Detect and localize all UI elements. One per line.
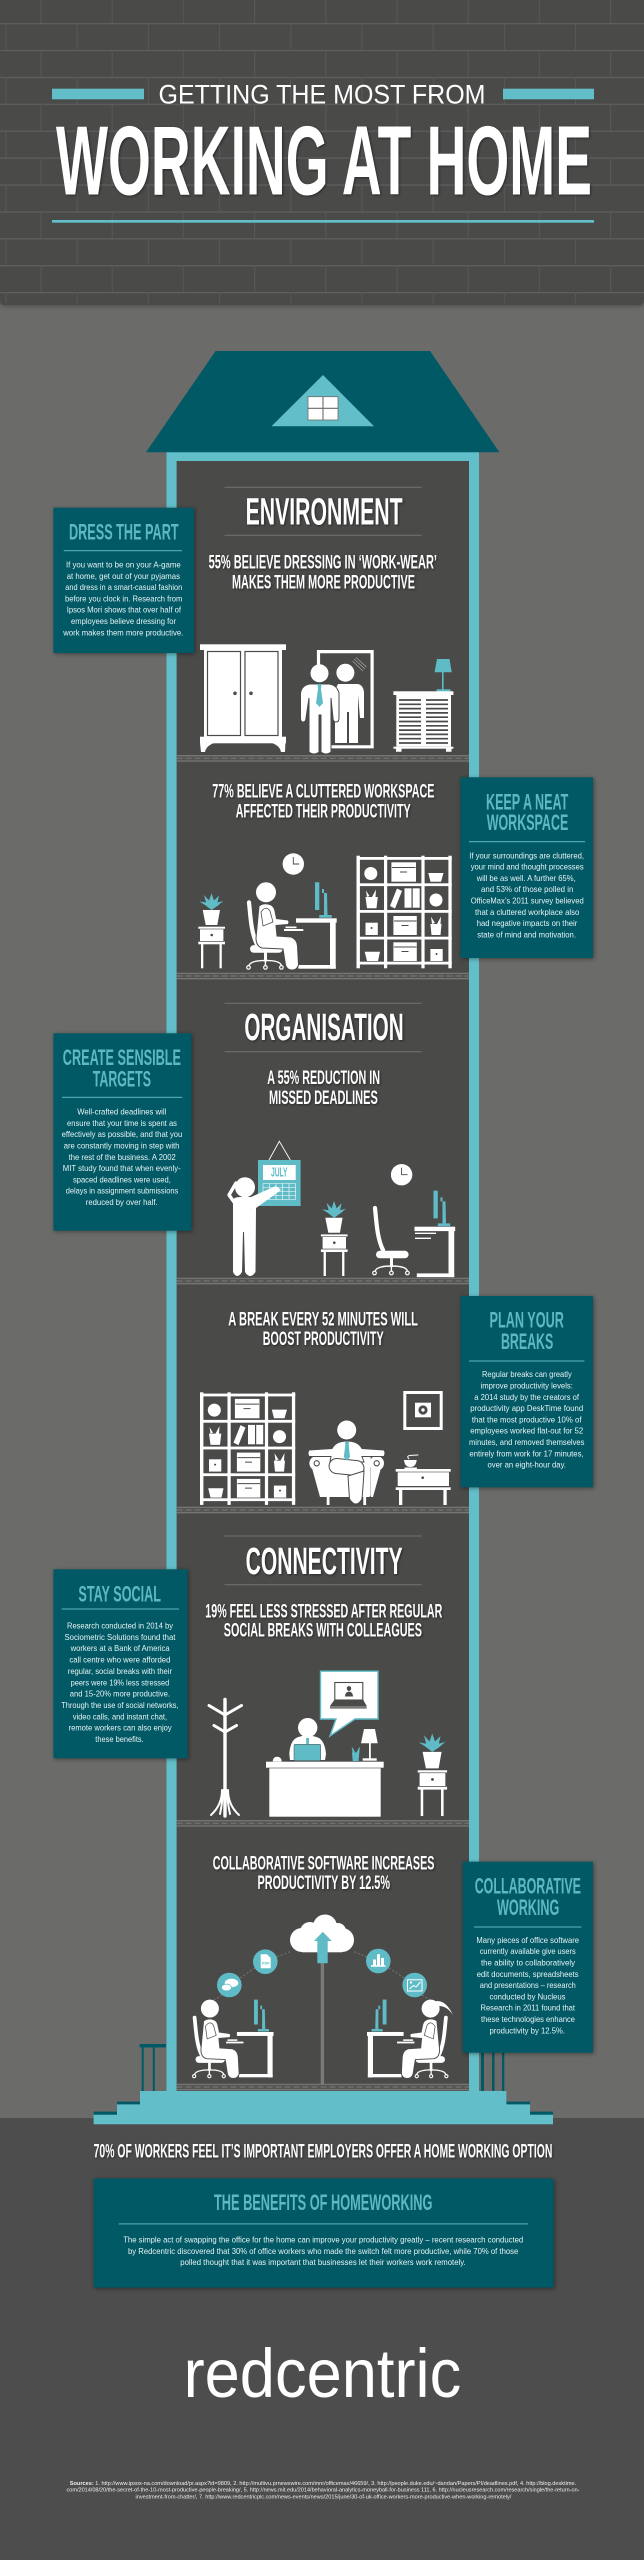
icon: chat circle [217, 1973, 242, 1997]
stat: break every 52 minutes: A BREAK EVERY 52 MINUTES WILL [228, 1309, 418, 1331]
icon: plant on stand [418, 1734, 447, 1816]
callout: plan your breaks [460, 1296, 593, 1487]
stat: cluttered workspace [212, 780, 435, 822]
stat: less stressed: SOCIAL BREAKS WITH COLLEAGUES [224, 1620, 422, 1642]
section heading: organisation: ORGANISATION [244, 1007, 404, 1049]
icon: bar chart circle [366, 1949, 391, 1973]
icon: coat stand [209, 1700, 242, 1816]
dotted connectors [214, 1952, 430, 2084]
icon: cabinet [393, 691, 453, 752]
seated figure [308, 1441, 385, 1504]
callout: create sensible targets: reduced by over half. [86, 1197, 158, 1207]
icon: pdf document circle: PDF [262, 1962, 270, 1966]
icon: person at mirror [300, 652, 372, 754]
icon: empty office chair [373, 1208, 409, 1275]
callout: stay social: these benefits. [95, 1734, 144, 1744]
callout: keep a neat workspace: will be as well. A further 65%, [476, 873, 576, 883]
icon: shelves [356, 856, 452, 968]
header accent bar left [52, 89, 144, 99]
stat: collaborative software: PRODUCTIVITY BY 12.5% [258, 1872, 390, 1894]
icon: wall clock [391, 1164, 412, 1185]
callout: plan your breaks: improve productivity levels: [480, 1380, 573, 1390]
callout: stay social: Research conducted in 2014 by [67, 1620, 174, 1630]
sources: investment-from-chatter/, 7. http://www.redcentricplc.com/news-events/news/2015/june/30-of-uk-office-workers-more-productive-when-working-remotely/ [136, 2495, 512, 2501]
callout: create sensible targets: are constantly moving in step with [64, 1140, 180, 1150]
icon: presentation chart circle [402, 1973, 427, 1997]
callout: keep a neat workspace: and 53% of those polled in [481, 884, 573, 894]
icon: left remote worker [193, 2000, 274, 2078]
callout: stay social: Sociometric Solutions found that [64, 1632, 176, 1642]
callout: stay social: peers were 19% less stressed [71, 1677, 169, 1687]
callout: stay social: regular, social breaks with their [68, 1666, 172, 1676]
reflection [335, 664, 364, 743]
panel: benefits of homeworking: THE BENEFITS OF HOMEWORKING [214, 2190, 432, 2215]
callout: collaborative working: productivity by 12.5%. [490, 2025, 565, 2035]
callout: collaborative working [463, 1862, 593, 2053]
callout: dress the part: and dress in a smart-casual fashion [65, 582, 182, 592]
callout: keep a neat workspace [460, 777, 593, 958]
icon: plant on stand [321, 1201, 348, 1276]
callout: plan your breaks: PLAN YOUR [490, 1308, 564, 1333]
callout: plan your breaks: productivity app DeskTime found [470, 1403, 583, 1413]
icon: desk and monitor [414, 1191, 455, 1277]
stat: work-wear: MAKES THEM MORE PRODUCTIVE [232, 571, 415, 593]
mirror glint [352, 658, 366, 671]
stat: break every 52 minutes [228, 1309, 418, 1350]
icon: person in armchair [308, 1420, 385, 1505]
steps dark edges [94, 2102, 553, 2115]
callout: keep a neat workspace: OfficeMax’s 2011 survey believed [471, 896, 584, 906]
callout: plan your breaks: entirely from work for 17 minutes, [469, 1448, 584, 1458]
callout: plan your breaks: BREAKS [501, 1329, 553, 1354]
callout: create sensible targets: TARGETS [93, 1067, 151, 1092]
armchair [309, 1456, 384, 1505]
callout: collaborative working: Many pieces of office software [476, 1935, 579, 1945]
section heading: connectivity [225, 1536, 422, 1585]
stat: deadlines: MISSED DEADLINES [269, 1087, 378, 1109]
callout: create sensible targets: effectively as possible, and that you [62, 1129, 182, 1139]
callout: plan your breaks: over an eight-hour day. [488, 1460, 566, 1470]
callout: keep a neat workspace: If your surroundings are cluttered, [469, 850, 584, 860]
callout: collaborative working: the ability to collaboratively [481, 1958, 576, 1968]
callout: dress the part [53, 508, 194, 653]
header panel: brick wall [0, 0, 644, 305]
callout: stay social [53, 1569, 188, 1758]
callout: stay social: remote workers can also enjoy [69, 1723, 172, 1733]
stat: deadlines: A 55% REDUCTION IN [267, 1067, 380, 1089]
callout: create sensible targets: Well-crafted deadlines will [77, 1107, 166, 1117]
callout: create sensible targets: spaced deadlines were used, [73, 1174, 171, 1184]
callout: keep a neat workspace: state of mind and motivation. [477, 929, 576, 939]
railing right [481, 2044, 504, 2091]
panel: benefits of homeworking: polled thought that it was important that businesses let their workers work remotely. [180, 2257, 466, 2267]
icon: lamp [434, 659, 452, 692]
callout: create sensible targets [53, 1033, 191, 1231]
callout: stay social: video calls, and instant chat, [73, 1711, 167, 1721]
icon: plant on stand [198, 893, 225, 968]
header accent bar right [503, 89, 594, 99]
panel: benefits of homeworking: by Redcentric discovered that 30% of office workers who made the switch felt more productive, while 70% of those [128, 2246, 518, 2256]
callout: dress the part: DRESS THE PART [69, 519, 179, 544]
mirror frame [318, 652, 372, 747]
dormer window [308, 397, 338, 420]
stat: cluttered workspace: AFFECTED THEIR PRODUCTIVITY [236, 800, 411, 822]
stat: deadlines [267, 1067, 380, 1109]
icon: pen cup [352, 1747, 360, 1761]
callout: dress the part: at home, get out of your pyjamas [67, 571, 180, 581]
railing left [140, 2044, 166, 2091]
callout: stay social: STAY SOCIAL [78, 1582, 161, 1607]
callout: plan your breaks: that the most productive 10% of [472, 1414, 582, 1424]
callout: plan your breaks: minutes, and removed themselves [469, 1437, 584, 1447]
logo: redcentric: redcentric [184, 2335, 461, 2412]
icon: wall clock [283, 853, 304, 875]
callout: dress the part: If you want to be on your A-game [66, 560, 181, 570]
callout: keep a neat workspace: that a cluttered workplace also [475, 907, 579, 917]
callout: dress the part: employees believe dressing for [71, 616, 176, 626]
callout: stay social: Through the use of social networks, [61, 1700, 179, 1710]
callout: create sensible targets: MIT study found that when evenly- [63, 1163, 181, 1173]
callout: collaborative working: WORKING [497, 1895, 559, 1920]
house interior [177, 461, 469, 2091]
ground background: dark footer [0, 2118, 644, 2560]
callout: keep a neat workspace: WORKSPACE [487, 810, 568, 835]
section heading: environment: ENVIRONMENT [246, 491, 403, 533]
icon: seated worker [247, 882, 303, 970]
dormer [272, 375, 374, 426]
stat: collaborative software: COLLABORATIVE SOFTWARE INCREASES [213, 1852, 435, 1874]
callout: dress the part: Ipsos Mori shows that over half of [67, 605, 182, 615]
icon: speech bubble with video call [320, 1671, 378, 1736]
callout: collaborative working: conducted by Nucleus [490, 1991, 566, 2001]
icon: calendar: JULY [271, 1165, 288, 1180]
icon: cloud upload [290, 1914, 354, 1963]
icon: calendar [258, 1141, 301, 1206]
section heading: connectivity: CONNECTIVITY [246, 1541, 403, 1583]
sources [66, 2481, 580, 2501]
callout: keep a neat workspace: KEEP A NEAT [486, 789, 568, 814]
section heading: environment [225, 487, 422, 535]
callout: create sensible targets: delays in assignment submissions [66, 1186, 178, 1196]
icon: framed picture [405, 1392, 441, 1428]
callout: stay social: workers at a Bank of America [70, 1643, 170, 1653]
stat: work-wear [209, 551, 437, 593]
callout: plan your breaks: a 2014 study by the creators of [474, 1392, 580, 1402]
callout: create sensible targets: CREATE SENSIBLE [63, 1045, 181, 1070]
stat: less stressed [205, 1600, 442, 1642]
stat: less stressed: 19% FEEL LESS STRESSED AFTER REGULAR [205, 1600, 442, 1622]
icon: shelves [200, 1392, 295, 1505]
stat: work-wear: 55% BELIEVE DRESSING IN ‘WORK-WEAR’ [209, 551, 437, 573]
callout: create sensible targets: the rest of the business. A 2002 [69, 1152, 176, 1162]
callout: keep a neat workspace: had negative impacts on their [477, 918, 577, 928]
callout: keep a neat workspace: your mind and thought processes [471, 862, 584, 872]
callout: stay social: call centre who were afforded [69, 1655, 171, 1665]
floor dividers [177, 755, 469, 2090]
stat: break every 52 minutes: BOOST PRODUCTIVITY [263, 1328, 384, 1350]
callout: plan your breaks: employees worked flat-out for 52 [470, 1426, 583, 1436]
icon: desk lamp [361, 1729, 378, 1761]
subtitle: GETTING THE MOST FROM [158, 79, 486, 109]
callout: stay social: and 15-20% more productive. [70, 1689, 170, 1699]
callout: collaborative working: and presentations – research [480, 1980, 576, 1990]
sources: com/2014/08/20/the-secret-of-the-10-most-productive-people-breaking/, 5. http://news.mit.edu/2014/behavioral-analytics-moneyball-for-business 111, 6. http://nucleusresearch.com/research/single/the-return-on- [66, 2488, 580, 2494]
sources: Sources: 1. http://www.ipsos-na.com/download/pr.aspx?id=9809, 2. http://multivu.prnewswire.com/mnr/officemax/46659/, 3. http://people.duke.edu/~dandan/Papers/PI/deadlines.pdf, 4. http://blog.desktime. [70, 2481, 577, 2487]
icon: pdf document circle [253, 1949, 278, 1974]
callout: collaborative working: Research in 2011 found that [480, 2003, 576, 2013]
section heading: organisation [225, 1003, 422, 1052]
icon: right remote worker [367, 2000, 453, 2078]
callout: dress the part: work makes them more productive. [62, 627, 183, 637]
roof [146, 351, 499, 452]
header underline [52, 220, 594, 223]
house walls [166, 452, 479, 2091]
icon: wardrobe [200, 644, 286, 752]
stat: collaborative software [213, 1852, 435, 1894]
person [300, 664, 339, 754]
icon: standing person [229, 1177, 281, 1276]
callout: plan your breaks: Regular breaks can greatly [482, 1369, 572, 1379]
stat: cluttered workspace: 77% BELIEVE A CLUTTERED WORKSPACE [212, 780, 435, 802]
steps [94, 2091, 553, 2124]
callout: create sensible targets: ensure that your time is spent as [67, 1118, 177, 1128]
panel: benefits of homeworking [94, 2178, 554, 2288]
icon: person at reception desk [266, 1718, 384, 1817]
callout: dress the part: before you clock in. Research from [65, 593, 182, 603]
icon: side table with cup [396, 1455, 451, 1505]
house: stairs and railings [94, 2044, 553, 2124]
icon: desk and monitor [296, 882, 337, 969]
panel: benefits of homeworking: The simple act of swapping the office for the home can improve your productivity greatly – recent research conducted [123, 2234, 523, 2244]
callout: collaborative working: edit documents, spreadsheets [477, 1969, 579, 1979]
callout: collaborative working: these technologies enhance [481, 2014, 575, 2024]
callout: collaborative working: currently available give users [480, 1946, 576, 1956]
